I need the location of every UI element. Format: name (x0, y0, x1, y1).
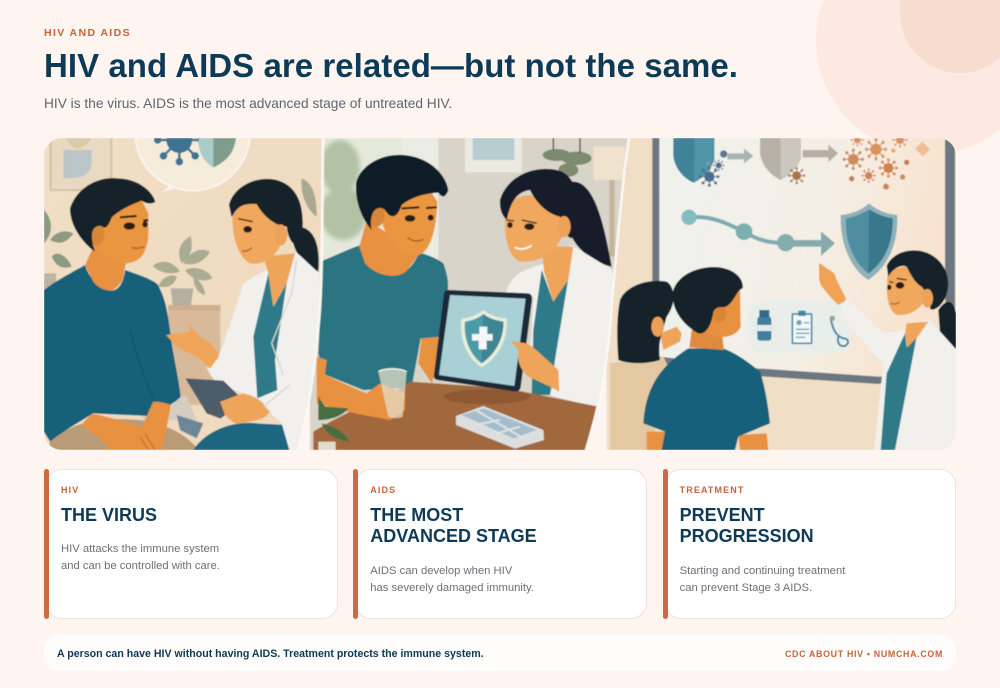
scene 3: doctor at presentation board (607, 132, 960, 453)
card body: HIV attacks the immune system (61, 542, 219, 554)
subtitle: HIV is the virus. AIDS is the most advanced stage of untreated HIV. (44, 96, 452, 111)
table (313, 382, 598, 450)
card body (680, 564, 846, 594)
card heading: ADVANCED STAGE (370, 526, 537, 546)
woman from behind (610, 281, 682, 450)
card body: Starting and continuing treatment (680, 564, 845, 576)
man arm and hand holding glass of water (317, 357, 407, 420)
key takeaway: A person can have HIV without having AIDS. Treatment protects the immune system. (57, 648, 484, 660)
man in teal t-shirt (318, 155, 448, 390)
illustration: three clinic scenes (44, 138, 956, 450)
card body: AIDS can develop when HIV (370, 564, 512, 576)
card heading: PROGRESSION (680, 526, 814, 546)
card label: TREATMENT (680, 485, 744, 495)
pill organizer (456, 406, 544, 449)
card body: and can be controlled with care. (61, 560, 220, 572)
scene 2: doctor showing tablet with shield (310, 135, 643, 453)
eyebrow label: HIV AND AIDS (44, 27, 131, 39)
card body: can prevent Stage 3 AIDS. (680, 582, 812, 594)
stage shields and virus arrows (673, 132, 930, 190)
card body (370, 564, 534, 594)
card: AIDS (353, 469, 647, 619)
card heading (680, 505, 814, 546)
card body (61, 542, 220, 572)
card label: AIDS (370, 485, 396, 495)
medicine, clipboard and stethoscope icons (748, 300, 852, 353)
card body: has severely damaged immunity. (370, 582, 534, 594)
card label: HIV (61, 485, 79, 495)
tablet with shield and cross (434, 290, 532, 391)
plant on table (318, 397, 349, 442)
hand pointing at tablet (511, 341, 559, 392)
doctor with tablet (166, 179, 319, 450)
card heading: THE VIRUS (61, 505, 157, 525)
bubble: virus and shield (134, 138, 251, 192)
scene 1: patient and doctor talking (44, 138, 322, 450)
patient in blue sweater (44, 178, 198, 450)
progress path to shield (681, 203, 897, 280)
card: HIV (44, 469, 338, 619)
doctor with ponytail (500, 169, 613, 408)
title: HIV and AIDS are related—but not the same. (44, 47, 738, 84)
man from behind in blue t-shirt (643, 267, 770, 450)
card heading: THE MOST (370, 505, 463, 525)
card heading (370, 505, 537, 546)
footer bar (44, 635, 956, 671)
source credit: CDC ABOUT HIV • NUMCHA.COM (785, 649, 943, 659)
presentation board (652, 137, 955, 384)
card: treatment (663, 469, 956, 619)
card heading: PREVENT (680, 505, 765, 525)
doctor pointing at shield (819, 250, 957, 450)
